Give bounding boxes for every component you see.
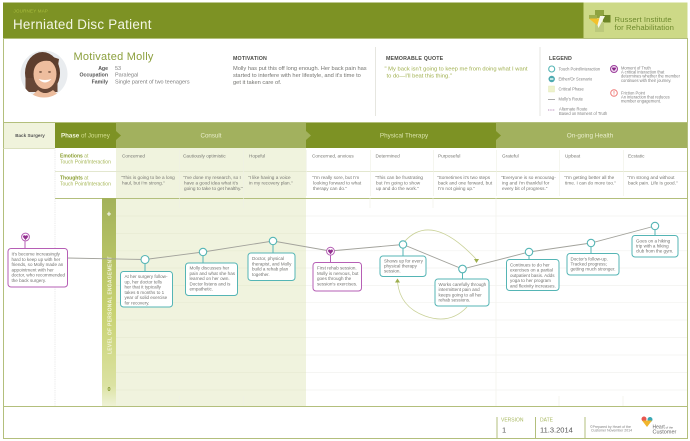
callout: discusses pain: empathetic. — [190, 287, 213, 292]
icon: cross logo — [589, 10, 610, 32]
callout: surgery follow-up: for recovery. — [124, 300, 149, 306]
callout: rehab plan: together. — [252, 272, 270, 277]
callout: outpatient exercises: outpatient basis. Adds — [510, 273, 555, 278]
thoughts row: "I'm strong and without — [627, 175, 675, 180]
emotions row: Grateful — [502, 154, 519, 158]
callout: works carefully: Works carefully through — [438, 282, 487, 287]
thoughts row: but I'm going to show — [376, 180, 421, 186]
callout: discusses pain: pain and what she has — [190, 271, 236, 276]
thoughts row — [121, 175, 678, 191]
thoughts row: "Everyone is so encourag- — [501, 175, 556, 180]
emotions row: Purposeful — [438, 154, 460, 158]
legend: friction point: Friction Point — [621, 90, 646, 96]
legend — [548, 56, 681, 116]
callout: doctor's follow-up: Doctor's follow-up. — [570, 256, 608, 262]
legend: moment of truth: Moment of Truth — [621, 66, 652, 70]
callout: shows up: Shows up for every — [384, 258, 424, 264]
emotions row: Hopeful — [249, 154, 265, 158]
quote heading: MEMORABLE QUOTE — [386, 56, 444, 62]
thoughts row: "I'm getting better all the — [564, 175, 615, 180]
callout: hiking trip: club from the gym. — [636, 248, 673, 254]
thoughts row label: Touch Point/Interaction — [60, 182, 111, 188]
emotions row label: Touch Point/Interaction — [60, 160, 111, 166]
legend: moment of truth: determines whether the member — [621, 74, 681, 79]
footer: version: VERSION — [501, 418, 524, 424]
thoughts row: therapy can do." — [313, 186, 347, 191]
organization name: Russert Institute — [614, 15, 672, 24]
back surgery cell — [4, 123, 55, 148]
callout: surgery follow-up: takes 6 months to 1 — [124, 290, 165, 295]
thoughts row: I'm not giving up." — [438, 186, 475, 191]
legend: either/or: Either/Or Scenario — [558, 76, 593, 82]
legend: moment of truth: A critical interaction that — [621, 70, 665, 75]
legend: route: Molly's Route — [558, 97, 584, 102]
arrow: lower loop — [395, 278, 467, 319]
callout: works carefully — [435, 265, 489, 306]
thoughts row: "I'm really sore, but I'm — [312, 175, 359, 180]
legend: friction point: An interaction that reduces — [621, 95, 670, 100]
icon: heart of the customer logo: Heart of the — [652, 424, 673, 430]
phase: on-going health: On-going Health — [567, 132, 614, 140]
callout: moment of truth, back surgery: It's become increasingly — [12, 252, 61, 256]
callout: moment of truth, back surgery: appointment with her — [12, 267, 54, 272]
molly's route line — [67, 226, 655, 269]
callout: discusses pain: Doctor listens and is — [190, 281, 231, 286]
callout: moment of truth, back surgery: friends, so Molly made an — [12, 262, 64, 267]
phase: consult — [116, 123, 306, 148]
arrow: phase chevrons — [116, 131, 501, 140]
logo panel — [584, 2, 688, 38]
callout: hiking trip — [632, 222, 678, 257]
thoughts row: "This is going to be a long — [121, 175, 175, 180]
engagement axis — [102, 198, 116, 406]
legend: moment of truth: continues with their journey. — [621, 78, 672, 83]
persona name: Motivated Molly — [74, 51, 154, 63]
title: Herniated Disc Patient — [13, 17, 152, 32]
header banner — [3, 2, 584, 38]
callout: works carefully: intermittent pain and — [438, 287, 480, 292]
thoughts row: every bit of progress." — [502, 186, 548, 191]
emotions row — [122, 154, 645, 158]
callout: moment of truth, back surgery — [8, 233, 68, 287]
thoughts row: back and one forward, but — [438, 180, 493, 186]
callout: surgery follow-up: up, her doctor tells — [124, 279, 163, 284]
callout: doctor's follow-up: Tracked progress; — [570, 262, 607, 266]
occupation: Paralegal — [115, 73, 138, 79]
callout: surgery follow-up — [120, 256, 172, 307]
callout: moment of truth, back surgery: hard to keep up with her — [12, 257, 61, 262]
chart grid, unshaded — [306, 216, 687, 390]
callout: outpatient exercises: Continues to do her — [510, 262, 550, 268]
column separators — [180, 150, 624, 196]
occupation — [79, 73, 138, 79]
callout: shows up — [380, 241, 426, 276]
callout: rehab plan — [248, 237, 295, 280]
thoughts row label: at — [83, 176, 89, 182]
footer: credit — [585, 417, 632, 438]
icon: heart of the customer logo — [642, 416, 677, 436]
emotions row: Concerned, anxious — [312, 154, 354, 158]
back surgery cell: Back Surgery — [15, 133, 45, 138]
motivation block — [233, 56, 367, 86]
legend: critical phase: Critical Phase — [558, 86, 584, 92]
callout: works carefully: rehab sessions. — [438, 298, 470, 303]
thoughts row: up and do the work." — [376, 186, 419, 191]
divider — [376, 47, 540, 116]
thoughts row: ing and I'm thankful for — [502, 180, 550, 186]
quote text: " My back isn't going to keep me from doing what I want — [384, 66, 528, 72]
quote text: to do—I'll beat this thing." — [386, 74, 452, 80]
legend heading: LEGEND — [549, 56, 572, 62]
callout: moment of truth, first rehab session: First rehab session. — [317, 266, 357, 270]
emotions row: Concerned — [122, 154, 145, 158]
footer: date: 11.3.2014 — [540, 426, 573, 434]
callout: surgery follow-up: At her surgery follow- — [124, 274, 168, 279]
callout: moment of truth, back surgery: doctor, who recommended — [12, 273, 66, 278]
thoughts row: "Sometimes it's two steps — [437, 175, 491, 180]
motivation text: started to interfere with her lifestyle, and it's time to — [233, 73, 361, 79]
callout: outpatient exercises: and flexivity increases. — [510, 283, 556, 288]
emotions row: Upbeat — [565, 154, 581, 158]
callout: rehab plan: therapist, and Molly — [252, 261, 292, 266]
motivation heading: MOTIVATION — [233, 56, 267, 62]
row rules — [3, 148, 55, 150]
callout: hiking trip: Goes on a hiking — [636, 238, 671, 244]
icon: heart of the customer logo: Customer — [652, 430, 677, 436]
motivation text: Molly has put this off long enough. Her back pain has — [233, 66, 367, 72]
footer: version: 1 — [502, 426, 506, 434]
axis label: LEVEL OF PERSONAL ENGAGEMENT — [108, 256, 114, 354]
memorable quote block — [384, 56, 528, 80]
callout: moment of truth, first rehab session: goes through the — [317, 276, 352, 281]
arrow: upper loop — [405, 230, 479, 263]
legend: alternate route — [548, 107, 608, 116]
persona details — [74, 51, 190, 85]
phase row — [4, 123, 687, 148]
footer: version — [497, 417, 524, 438]
callout: surgery follow-up: year of solid exercise — [124, 295, 168, 300]
axis bottom marker: 0 — [107, 387, 111, 393]
callout: surgery follow-up: her that it typically — [124, 285, 162, 290]
callout: moment of truth, first rehab session: Molly is nervous, but — [317, 271, 359, 276]
emotions row label — [60, 154, 111, 166]
callout: shows up: physical therapy — [384, 264, 418, 268]
thoughts row label — [60, 176, 111, 188]
footer: credit: ©Prepared by Heart of the — [590, 425, 631, 429]
footer: date: DATE — [540, 418, 554, 424]
callout: doctor's follow-up — [567, 239, 619, 275]
age: 53 — [115, 66, 121, 72]
callout: outpatient exercises: exercises on a partial — [510, 268, 553, 273]
consult critical phase shading — [116, 148, 306, 406]
emotions row label: Emotions — [60, 154, 83, 160]
thoughts row: looking forward to what — [313, 180, 362, 186]
emotions row: Determined — [376, 154, 400, 158]
phase: on-going health — [496, 123, 687, 148]
thoughts row: time. I can do more too." — [565, 180, 616, 186]
thoughts row: in my recovery plan." — [249, 180, 293, 186]
axis top marker: + — [107, 210, 112, 218]
occupation: Occupation — [79, 73, 108, 79]
persona photo — [20, 50, 68, 99]
phase: consult: Consult — [201, 132, 222, 140]
emotions row label: at — [83, 154, 89, 160]
motivation text: get it taken care of. — [233, 80, 282, 86]
thoughts row: haul, but I'm strong." — [122, 180, 165, 186]
legend: alternate route: Based on Moment of Truth — [559, 111, 608, 116]
callout: moment of truth, first rehab session: session's exercises. — [317, 281, 357, 286]
callout: works carefully: keeps going to all her — [438, 292, 482, 297]
emotions row: Cautiously optimistic — [183, 154, 226, 158]
thoughts row: "I like having a voice — [248, 175, 291, 180]
callout: discusses pain — [186, 248, 238, 296]
thoughts row: have a good idea what it's — [184, 180, 239, 186]
phase: physical therapy — [306, 123, 496, 148]
callout: hiking trip: trip with a hiking — [636, 244, 669, 248]
thoughts row label: Thoughts — [60, 176, 83, 182]
callout: doctor's follow-up: getting much stronger. — [570, 266, 616, 272]
family: Family — [92, 79, 108, 85]
family: Single parent of two teenagers — [115, 79, 190, 85]
thoughts row: going to take to get healthy." — [184, 186, 243, 191]
callout: discusses pain: learned on her own. — [190, 276, 230, 281]
thoughts row: back pain. Life is good." — [628, 180, 678, 186]
legend: moment of truth — [610, 66, 681, 83]
callout: outpatient exercises — [506, 248, 559, 290]
legend: touch point: Touch Point/Interaction — [558, 66, 601, 72]
footer: credit: Customer November 2014 — [591, 428, 632, 432]
callout: outpatient exercises: yoga to her program — [510, 278, 551, 283]
phase: physical therapy: Physical Therapy — [380, 132, 429, 140]
callout: rehab plan: Doctor, physical — [252, 256, 284, 261]
callout: shows up: session. — [384, 268, 401, 274]
age — [98, 66, 121, 72]
logo panel: for Rehabilitation — [614, 23, 674, 32]
legend: friction point: member engagement. — [621, 99, 661, 104]
callout: discusses pain: Molly discusses her — [190, 266, 230, 270]
phase of journey label: Phase of Journey — [61, 132, 111, 139]
phase of journey label — [55, 123, 116, 148]
callout: rehab plan: build a rehab plan — [252, 267, 289, 272]
legend: friction point — [611, 90, 670, 104]
emotions row: Ecstatic — [628, 154, 645, 158]
thoughts row: "This can be frustrating — [375, 175, 423, 180]
thoughts row: "I've done my research, so I — [183, 175, 241, 180]
footer: date — [536, 417, 573, 438]
age: Age — [98, 66, 108, 72]
eyebrow label: JOURNEY MAP — [14, 9, 48, 14]
callout: moment of truth, back surgery: the back surgery. — [12, 278, 46, 283]
chart grid, shaded phase — [116, 216, 306, 390]
legend: alternate route: Alternate Route — [559, 107, 588, 112]
callout: moment of truth, first rehab session — [313, 247, 362, 291]
